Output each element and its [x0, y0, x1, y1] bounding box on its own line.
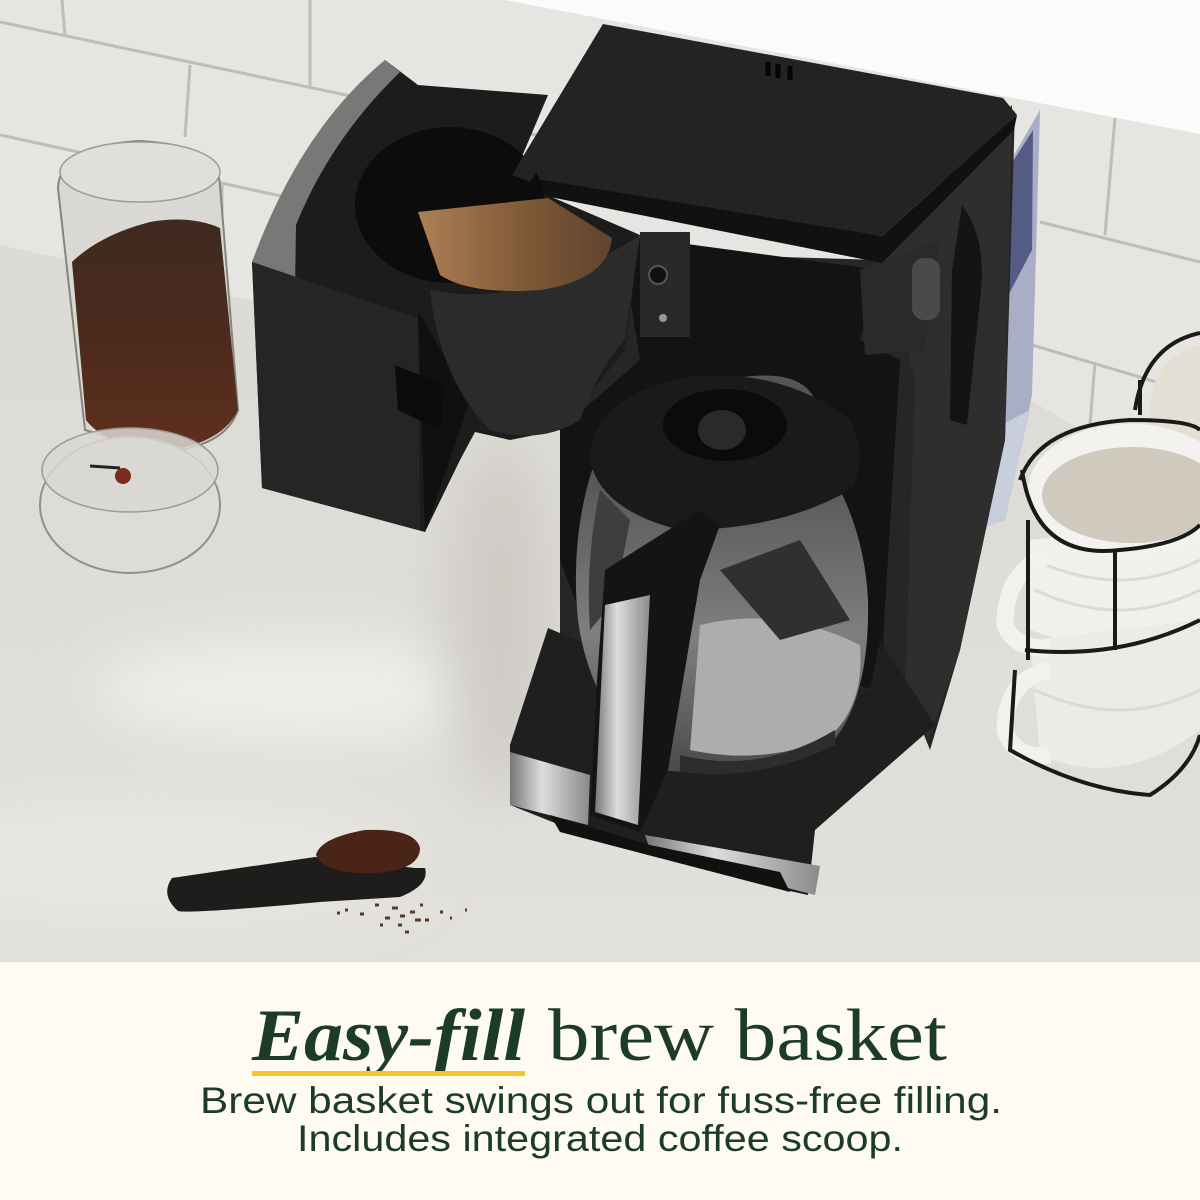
- lid overlap: [512, 24, 620, 182]
- water reservoir: [968, 110, 1040, 532]
- carafe handle: [590, 510, 720, 832]
- subtitle: Includes integrated coffee scoop.: [297, 1118, 903, 1159]
- coffee maker body: [560, 105, 1015, 750]
- title: Easy-fill: [251, 995, 525, 1077]
- title: [251, 995, 947, 1077]
- base plate: [510, 628, 935, 895]
- subtitle: [200, 1080, 1002, 1159]
- mug rack and mugs: [1005, 333, 1200, 795]
- panel: caption band: [0, 962, 1200, 1200]
- background: counter top: [0, 245, 1200, 962]
- swing-out brew basket: [252, 24, 640, 532]
- glass coffee canister: [40, 141, 238, 573]
- coffee scoop with grounds: [167, 830, 467, 932]
- top lid: [512, 24, 1017, 263]
- title: brew basket: [548, 995, 947, 1077]
- glass carafe: [576, 376, 868, 774]
- under-cabinet: [505, 0, 1200, 134]
- background: tile wall: [0, 0, 1200, 460]
- gold filter: [418, 198, 612, 291]
- yellow underline: [252, 1071, 525, 1076]
- subtitle: Brew basket swings out for fuss-free filling.: [200, 1080, 1002, 1121]
